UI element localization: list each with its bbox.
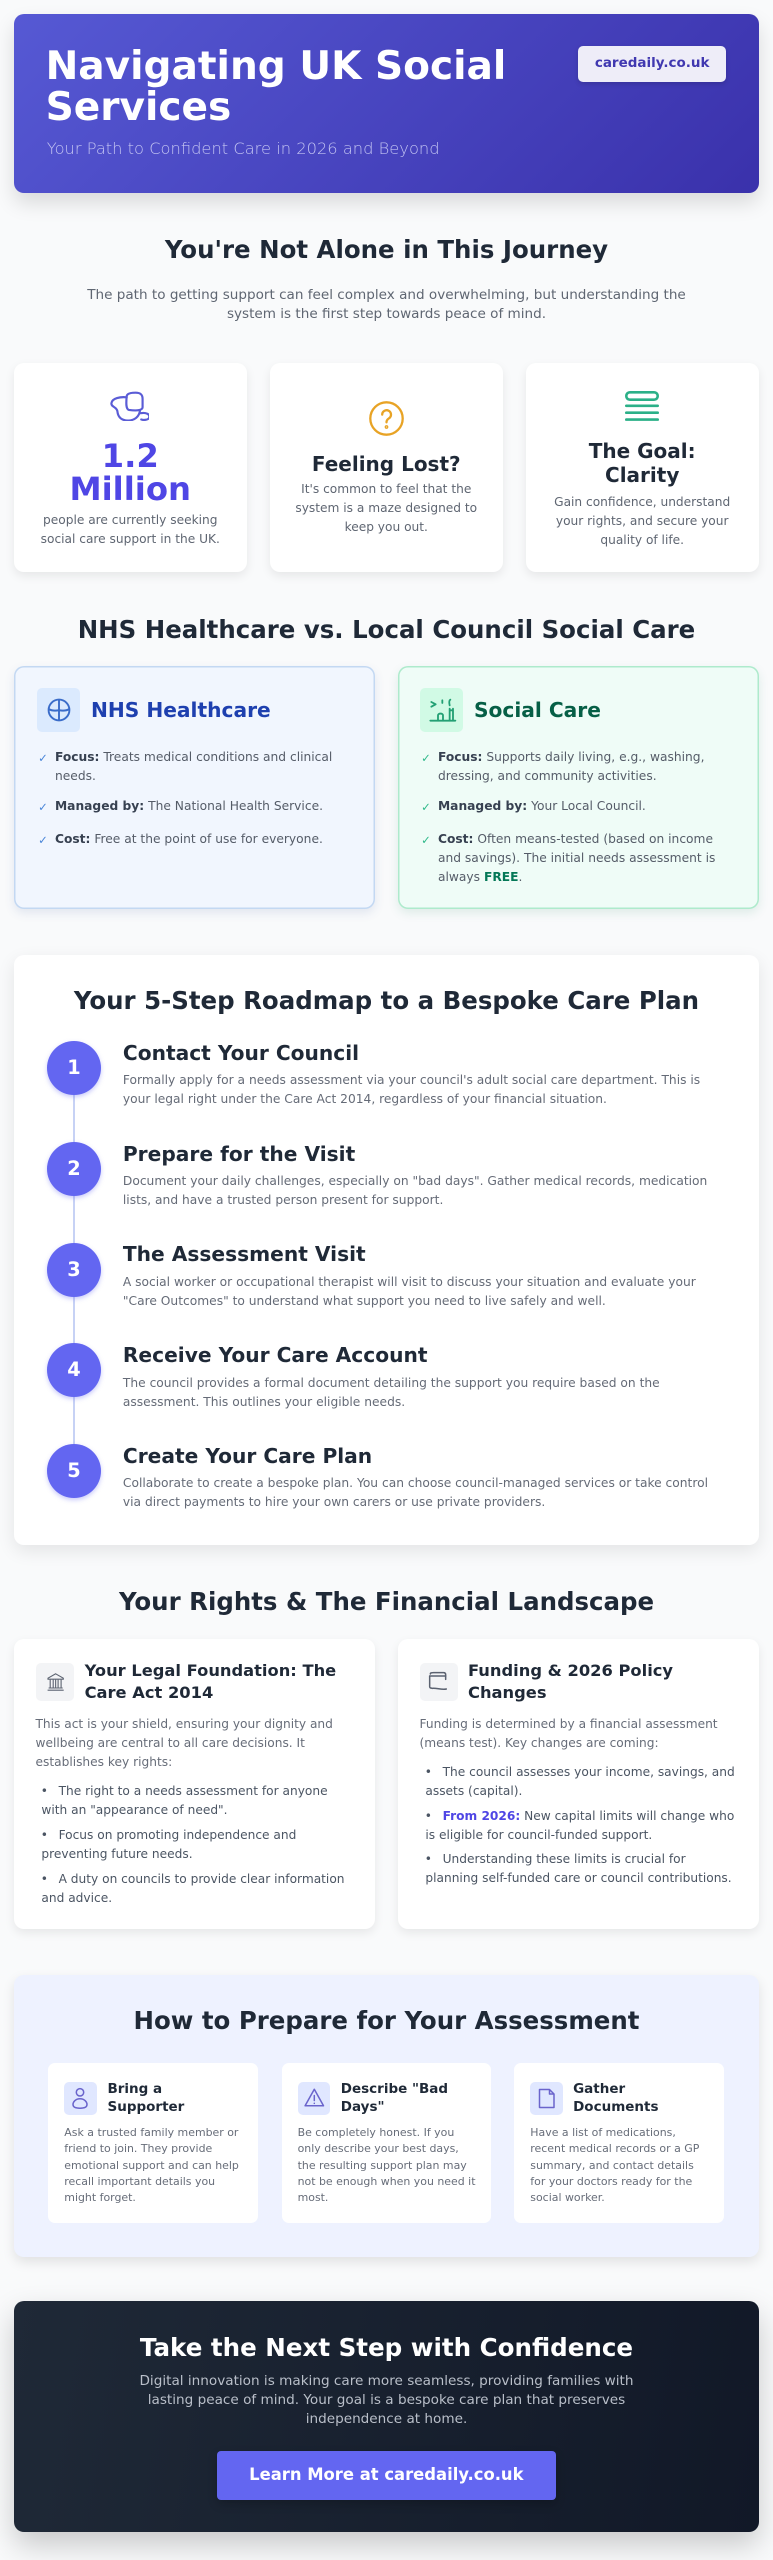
icon: person	[64, 2082, 97, 2115]
heading: comparison: NHS Healthcare vs. Local Council Social Care	[78, 615, 695, 644]
step text: assessment. This outlines your eligible needs.	[123, 1395, 405, 1409]
title: Services	[46, 85, 231, 130]
bullet: •	[41, 1828, 48, 1842]
heading	[84, 1661, 336, 1702]
panel: roadmap	[14, 955, 759, 1545]
text: only describe your best days,	[298, 2142, 459, 2155]
step 5	[45, 1444, 708, 1509]
number	[47, 1142, 101, 1196]
item: managed by: Managed by: The National Health Service.	[55, 799, 323, 813]
item: cost: Cost: Often means-tested (based on income	[438, 832, 713, 846]
bullet	[425, 1809, 734, 1842]
stat value	[69, 437, 191, 508]
item: focus: Focus: Treats medical conditions and clinical	[55, 750, 332, 764]
heading: Gather	[573, 2081, 625, 2097]
heading: Care Act 2014	[85, 1683, 213, 1702]
text: keep you out.	[345, 520, 428, 534]
item: cost: ✓	[421, 833, 431, 847]
bullet: is eligible for council-funded support.	[425, 1828, 652, 1842]
number	[47, 1041, 101, 1095]
text: Ask a trusted family member or	[64, 2126, 238, 2139]
stat caption: people are currently seeking	[43, 513, 217, 527]
text: most.	[298, 2191, 328, 2204]
bullet: assets (capital).	[425, 1784, 522, 1798]
stat value: Million	[69, 470, 191, 508]
text	[295, 482, 477, 534]
paragraph	[35, 1717, 333, 1769]
panel: NHS healthcare	[14, 666, 375, 909]
item: cost: Cost: Free at the point of use for everyone.	[55, 832, 323, 846]
panel: social care	[398, 666, 759, 909]
text: quality of life.	[600, 533, 684, 547]
icon box: social care	[420, 688, 463, 732]
site badge: caredaily.co.uk	[595, 55, 709, 71]
text: summary, and contact details	[530, 2159, 694, 2172]
heading: Changes	[468, 1683, 547, 1702]
number: 4	[67, 1358, 81, 1381]
CTA text	[14, 2372, 759, 2429]
number	[47, 1243, 101, 1297]
step 3	[45, 1242, 696, 1343]
bullet: and advice.	[41, 1891, 112, 1905]
bullet: A duty on councils to provide clear information	[59, 1872, 345, 1886]
icon box: NHS	[37, 688, 80, 732]
heading	[341, 2081, 448, 2115]
text	[298, 2126, 476, 2204]
connector	[73, 1095, 75, 1142]
heading: Bring a	[107, 2081, 162, 2097]
panel: funding	[398, 1639, 759, 1929]
stat card: 1.2 million	[14, 363, 246, 572]
bullet	[425, 1852, 732, 1885]
text	[554, 495, 730, 547]
step title: Contact Your Council	[123, 1041, 359, 1065]
heading: Funding & 2026 Policy	[468, 1661, 673, 1680]
item: focus: Focus: Supports daily living, e.g., washing,	[438, 750, 704, 764]
bullet: Focus on promoting independence and	[59, 1828, 296, 1842]
paragraph: This act is your shield, ensuring your dignity and	[35, 1717, 333, 1731]
step text: "Care Outcomes" to understand what support you need to live safely and well.	[123, 1294, 606, 1308]
icon: list	[625, 391, 659, 421]
heading	[573, 2080, 659, 2117]
item: cost: ✓	[38, 833, 48, 847]
step title: The Assessment Visit	[123, 1242, 366, 1266]
bullet: preventing future needs.	[41, 1847, 193, 1861]
item: cost	[421, 832, 715, 884]
paragraph: wellbeing are central to all care decisions. It	[35, 1736, 305, 1750]
item: focus	[421, 750, 704, 783]
panel: call to action	[14, 2301, 759, 2532]
text: your rights, and secure your	[556, 514, 728, 528]
text: Gain confidence, understand	[554, 495, 730, 509]
step 4	[45, 1343, 660, 1444]
step text: The council provides a formal document detailing the support you require based on the	[123, 1376, 660, 1390]
CTA button: Learn More at caredaily.co.uk	[249, 2465, 524, 2484]
bullet	[41, 1784, 328, 1817]
prepare heading: How to Prepare for Your Assessment	[134, 2006, 639, 2035]
text: the resulting support plan may	[298, 2159, 467, 2172]
text: recent medical records or a GP	[530, 2142, 699, 2155]
number: 2	[67, 1157, 81, 1180]
roadmap heading: Your 5-Step Roadmap to a Bespoke Care Plan	[74, 986, 699, 1015]
connector	[73, 1397, 75, 1444]
text: not be enough when you need it	[298, 2175, 476, 2188]
heading: NHS Healthcare	[91, 698, 271, 722]
number	[47, 1444, 101, 1498]
text: recall important details you	[64, 2175, 215, 2188]
text: emotional support and can help	[64, 2159, 239, 2172]
step text: A social worker or occupational therapist will visit to discuss your situation and evaluate your	[123, 1275, 696, 1289]
title: Navigating UK Social	[46, 44, 506, 89]
item: cost: always FREE.	[438, 870, 522, 884]
card: bad days	[282, 2063, 491, 2223]
card: the goal	[526, 363, 759, 572]
step text: lists, and have a trusted person present for support.	[123, 1193, 443, 1207]
step text: via direct payments to hire your own carers or use private providers.	[123, 1495, 545, 1509]
bullet: planning self-funded care or council contributions.	[425, 1871, 732, 1885]
bullet: •	[41, 1872, 48, 1886]
step text	[122, 1376, 660, 1409]
step text	[123, 1174, 707, 1207]
bullet	[41, 1872, 345, 1905]
CTA text: Digital innovation is making care more seamless, providing families with	[139, 2373, 634, 2389]
paragraph	[420, 1717, 718, 1750]
step 1	[45, 1041, 700, 1142]
card: supporter	[48, 2063, 258, 2223]
heading	[107, 2081, 184, 2115]
item: focus: ✓	[38, 751, 48, 765]
stat value: 1.2	[102, 437, 159, 475]
text: social worker.	[530, 2191, 605, 2204]
text: Be completely honest. If you	[298, 2126, 454, 2139]
connector	[73, 1196, 75, 1243]
step 2	[45, 1142, 707, 1243]
number	[47, 1343, 101, 1397]
bullet: From 2026: New capital limits will change who	[443, 1809, 734, 1823]
heading: Clarity	[605, 463, 679, 487]
intro text	[87, 287, 686, 322]
CTA text: lasting peace of mind. Your goal is a bespoke care plan that preserves	[148, 2392, 625, 2408]
CTA button	[217, 2451, 556, 2500]
item: focus: needs.	[55, 769, 96, 783]
text: for your doctors ready for the	[530, 2175, 692, 2188]
step text: Formally apply for a needs assessment via your council's adult social care department. This is	[123, 1073, 700, 1087]
icon: warning	[298, 2082, 330, 2115]
number: 1	[67, 1056, 81, 1079]
bullet: with an "appearance of need".	[41, 1803, 228, 1817]
text: Have a list of medications,	[530, 2126, 676, 2139]
bullet: The council assesses your income, savings, and	[443, 1765, 735, 1779]
icon: bank	[36, 1663, 74, 1701]
item: managed by: ✓	[38, 800, 48, 814]
heading: not alone: You're Not Alone in This Journey	[165, 235, 608, 264]
intro text: system is the first step towards peace of mind.	[227, 306, 546, 322]
heading: Your Legal Foundation: The	[85, 1661, 336, 1680]
step title: Prepare for the Visit	[123, 1142, 355, 1166]
bullet: •	[425, 1765, 432, 1779]
item: cost: and savings). The initial needs assessment is	[438, 851, 715, 865]
bullet: •	[425, 1852, 432, 1866]
stat caption: social care support in the UK.	[41, 532, 220, 546]
heading: Supporter	[107, 2099, 184, 2115]
icon: question mark	[369, 401, 404, 436]
step text: your legal right under the Care Act 2014, regardless of your financial situation.	[123, 1092, 607, 1106]
step text: Collaborate to create a bespoke plan. You can choose council-managed services or take control	[123, 1476, 708, 1490]
item: focus	[38, 750, 332, 783]
card: feeling lost	[270, 363, 502, 572]
site badge	[578, 46, 726, 82]
paragraph: (means test). Key changes are coming:	[420, 1736, 659, 1750]
step title: Receive Your Care Account	[123, 1343, 428, 1367]
item: focus: ✓	[421, 751, 431, 765]
icon: stethoscope	[110, 392, 149, 421]
bullet: •	[425, 1809, 432, 1823]
CTA heading: Take the Next Step with Confidence	[140, 2333, 633, 2362]
heading: Days"	[341, 2099, 385, 2115]
number: 3	[67, 1258, 81, 1281]
stat caption	[41, 513, 220, 546]
bullet: The right to a needs assessment for anyone	[59, 1784, 328, 1798]
item: managed by: ✓	[421, 800, 431, 814]
icon: wallet	[420, 1663, 458, 1701]
panel: prepare	[14, 1974, 759, 2257]
step text	[123, 1275, 696, 1308]
step title: Create Your Care Plan	[123, 1444, 372, 1468]
text: system is a maze designed to	[295, 501, 477, 515]
step text: Document your daily challenges, especially on "bad days". Gather medical records, medication	[123, 1174, 707, 1188]
bullet: Understanding these limits is crucial for	[443, 1852, 686, 1866]
heading	[588, 439, 696, 487]
heading: Describe "Bad	[341, 2081, 448, 2097]
paragraph: establishes key rights:	[35, 1755, 172, 1769]
header banner	[14, 14, 759, 192]
text: friend to join. They provide	[64, 2142, 212, 2155]
heading: rights: Your Rights & The Financial Landscape	[119, 1587, 654, 1616]
heading: Documents	[573, 2099, 659, 2115]
item: managed by: Managed by: Your Local Council.	[438, 799, 646, 813]
heading: Social Care	[474, 698, 601, 722]
connector	[73, 1297, 75, 1344]
intro text: The path to getting support can feel complex and overwhelming, but understanding the	[87, 287, 686, 303]
paragraph: Funding is determined by a financial assessment	[420, 1717, 718, 1731]
bullet	[425, 1765, 735, 1798]
text	[530, 2125, 699, 2207]
number: 5	[67, 1459, 81, 1482]
bullet	[41, 1828, 296, 1861]
text: might forget.	[64, 2191, 136, 2204]
bullet: •	[41, 1784, 48, 1798]
heading	[468, 1661, 673, 1702]
subtitle: Your Path to Confident Care in 2026 and Beyond	[47, 139, 440, 158]
step text	[123, 1476, 708, 1509]
CTA text: independence at home.	[306, 2411, 467, 2427]
step text	[123, 1073, 700, 1106]
card: documents	[514, 2063, 724, 2223]
icon: document	[530, 2082, 563, 2115]
text	[64, 2126, 239, 2204]
panel: legal foundation	[14, 1639, 375, 1929]
item: focus: dressing, and community activities.	[438, 769, 657, 783]
title	[46, 44, 506, 130]
text: It's common to feel that the	[301, 482, 471, 496]
heading: The Goal:	[589, 439, 696, 463]
heading: Feeling Lost?	[312, 452, 461, 476]
